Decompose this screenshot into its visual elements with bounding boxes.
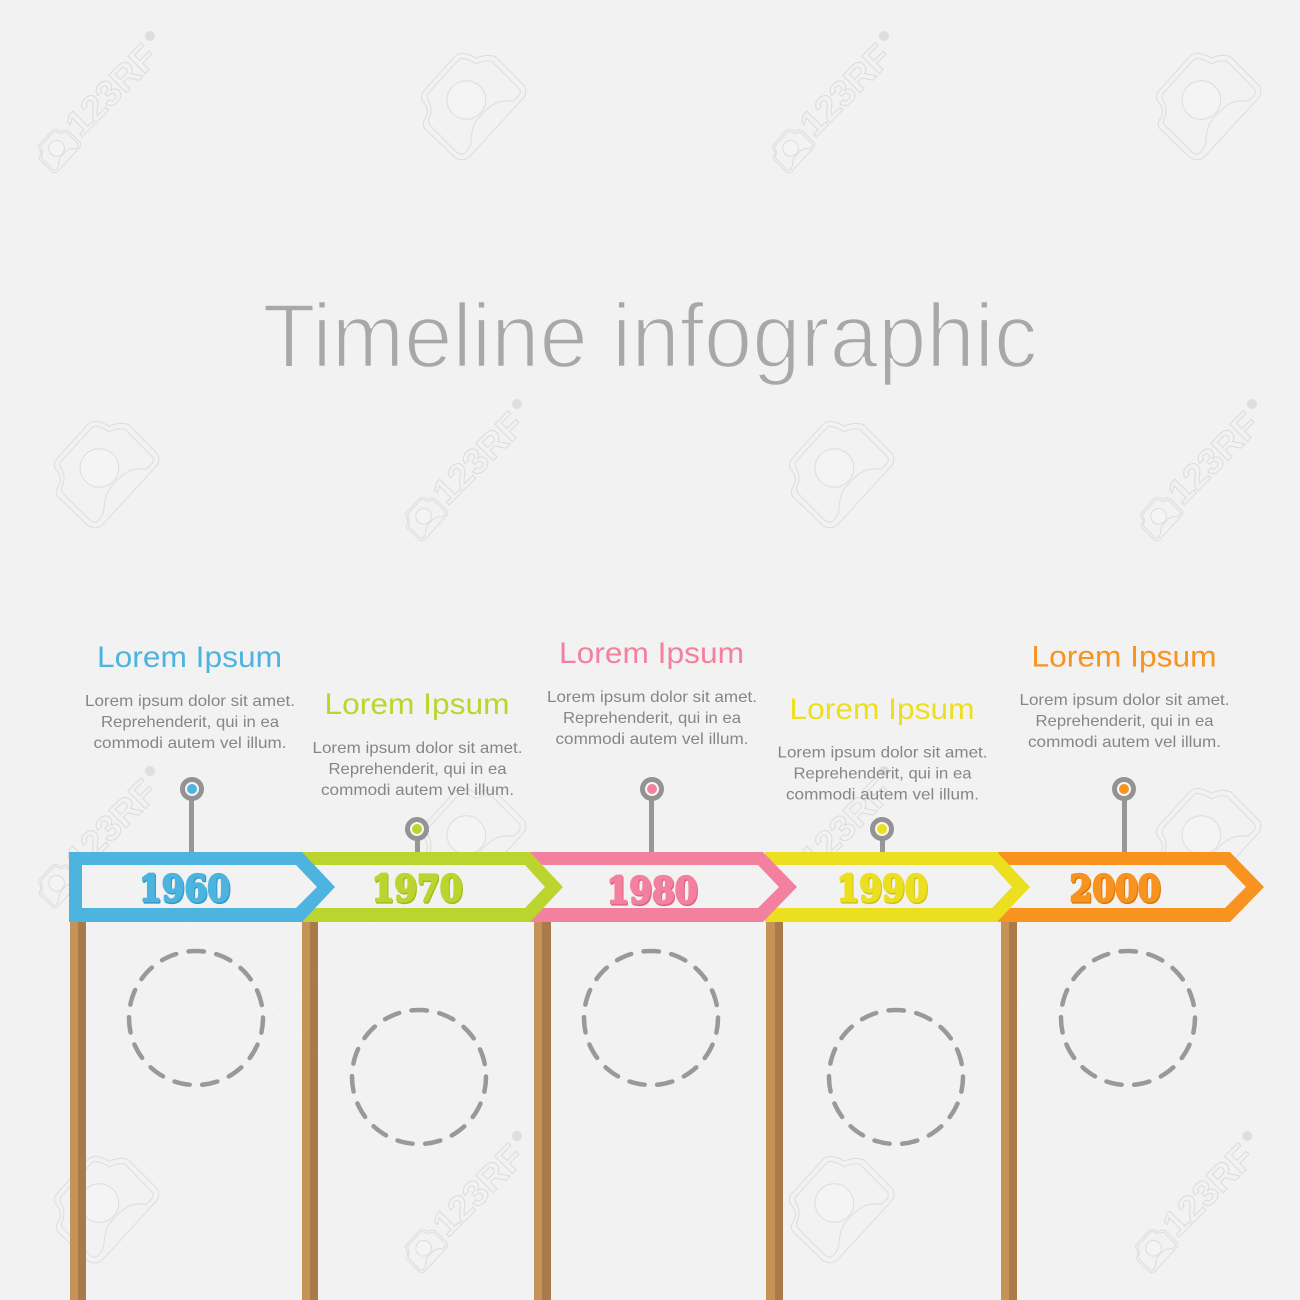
post 2 [302, 920, 318, 1300]
wooden posts [70, 920, 1017, 1300]
dashed circle 1970 [352, 1010, 486, 1144]
watermark 123RF marks: 123RF [791, 771, 899, 879]
watermark 123RF marks: 123RF [424, 404, 532, 512]
arrow 1980 [530, 852, 797, 922]
text block 1990 [778, 693, 988, 804]
year 1970: 1970 [372, 868, 464, 912]
year 2000: 2000 [1070, 867, 1160, 910]
year 1980: 1980 [608, 870, 698, 914]
body 1980: Reprehenderit, qui in ea [563, 710, 741, 727]
watermark 123RF marks: 123RF [1154, 1136, 1262, 1244]
pin 1990 [872, 820, 892, 854]
watermark 123RF marks: 123RF [424, 1136, 532, 1244]
text block 1960 [85, 641, 295, 752]
body 1980: Lorem ipsum dolor sit amet. [547, 689, 757, 706]
heading 1960: Lorem Ipsum [97, 641, 282, 674]
pin 1960 [182, 780, 202, 854]
watermark 123RF marks: 123RF [57, 36, 165, 144]
arrow 1990 [765, 852, 1030, 922]
year 1990: 1990 [838, 868, 928, 912]
heading 1970: Lorem Ipsum [324, 688, 510, 721]
body 1990: commodi autem vel illum. [786, 786, 979, 804]
body 1980: commodi autem vel illum. [556, 731, 748, 748]
dashed circle 1990 [829, 1010, 963, 1144]
post 1 [70, 920, 86, 1300]
body 1960: commodi autem vel illum. [94, 735, 286, 752]
body 2000: Reprehenderit, qui in ea [1036, 713, 1214, 730]
arrow 1970 [298, 852, 563, 922]
dashed circle 1960 [129, 951, 263, 1085]
year labels [139, 867, 1162, 914]
year 2000: 2000 [1070, 868, 1162, 912]
arrow band [69, 852, 1264, 922]
dashed circle 2000 [1061, 951, 1195, 1085]
post 4 [766, 920, 783, 1300]
text block 1970 [312, 688, 522, 799]
year 1960: 1960 [140, 868, 231, 912]
year 1970: 1970 [372, 867, 462, 910]
body 1970: commodi autem vel illum. [321, 782, 514, 799]
pin 1980 [642, 780, 662, 854]
body 1990: Lorem ipsum dolor sit amet. [778, 744, 988, 762]
body 1980 [547, 689, 757, 748]
year 1960: 1960 [139, 867, 230, 910]
arrow 2000 [998, 852, 1264, 922]
text block 1980 [547, 637, 757, 748]
year 1990: 1990 [836, 867, 928, 910]
body 1990 [778, 744, 988, 804]
post 3 [534, 920, 551, 1300]
title: Timeline infographic [262, 286, 1038, 387]
dashed circle 1980 [584, 951, 718, 1085]
heading 1980: Lorem Ipsum [559, 637, 744, 670]
body 2000: Lorem ipsum dolor sit amet. [1020, 692, 1230, 709]
heading 1990: Lorem Ipsum [790, 693, 974, 726]
watermark 123RF marks: 123RF [1159, 404, 1267, 512]
heading 2000: Lorem Ipsum [1032, 640, 1216, 674]
body 1960: Reprehenderit, qui in ea [101, 714, 279, 731]
pin 1970 [408, 820, 426, 854]
arrow 1960 [69, 852, 335, 922]
body 2000 [1020, 692, 1230, 751]
body 1970 [312, 740, 522, 799]
body 1970: Reprehenderit, qui in ea [328, 761, 507, 778]
body 2000: commodi autem vel illum. [1028, 734, 1221, 751]
body 1990: Reprehenderit, qui in ea [794, 766, 972, 782]
post 5 [1001, 920, 1017, 1300]
text block 2000 [1020, 640, 1230, 751]
watermark 123RF marks: 123RF [791, 36, 899, 144]
body 1960 [85, 693, 295, 752]
year 1980: 1980 [606, 869, 698, 912]
pins [182, 780, 1134, 854]
watermark 123RF marks: 123RF [57, 771, 165, 879]
pin 2000 [1114, 780, 1134, 854]
body 1960: Lorem ipsum dolor sit amet. [85, 693, 295, 710]
body 1970: Lorem ipsum dolor sit amet. [312, 740, 522, 757]
watermark diagonal lines [172, 173, 1120, 1122]
